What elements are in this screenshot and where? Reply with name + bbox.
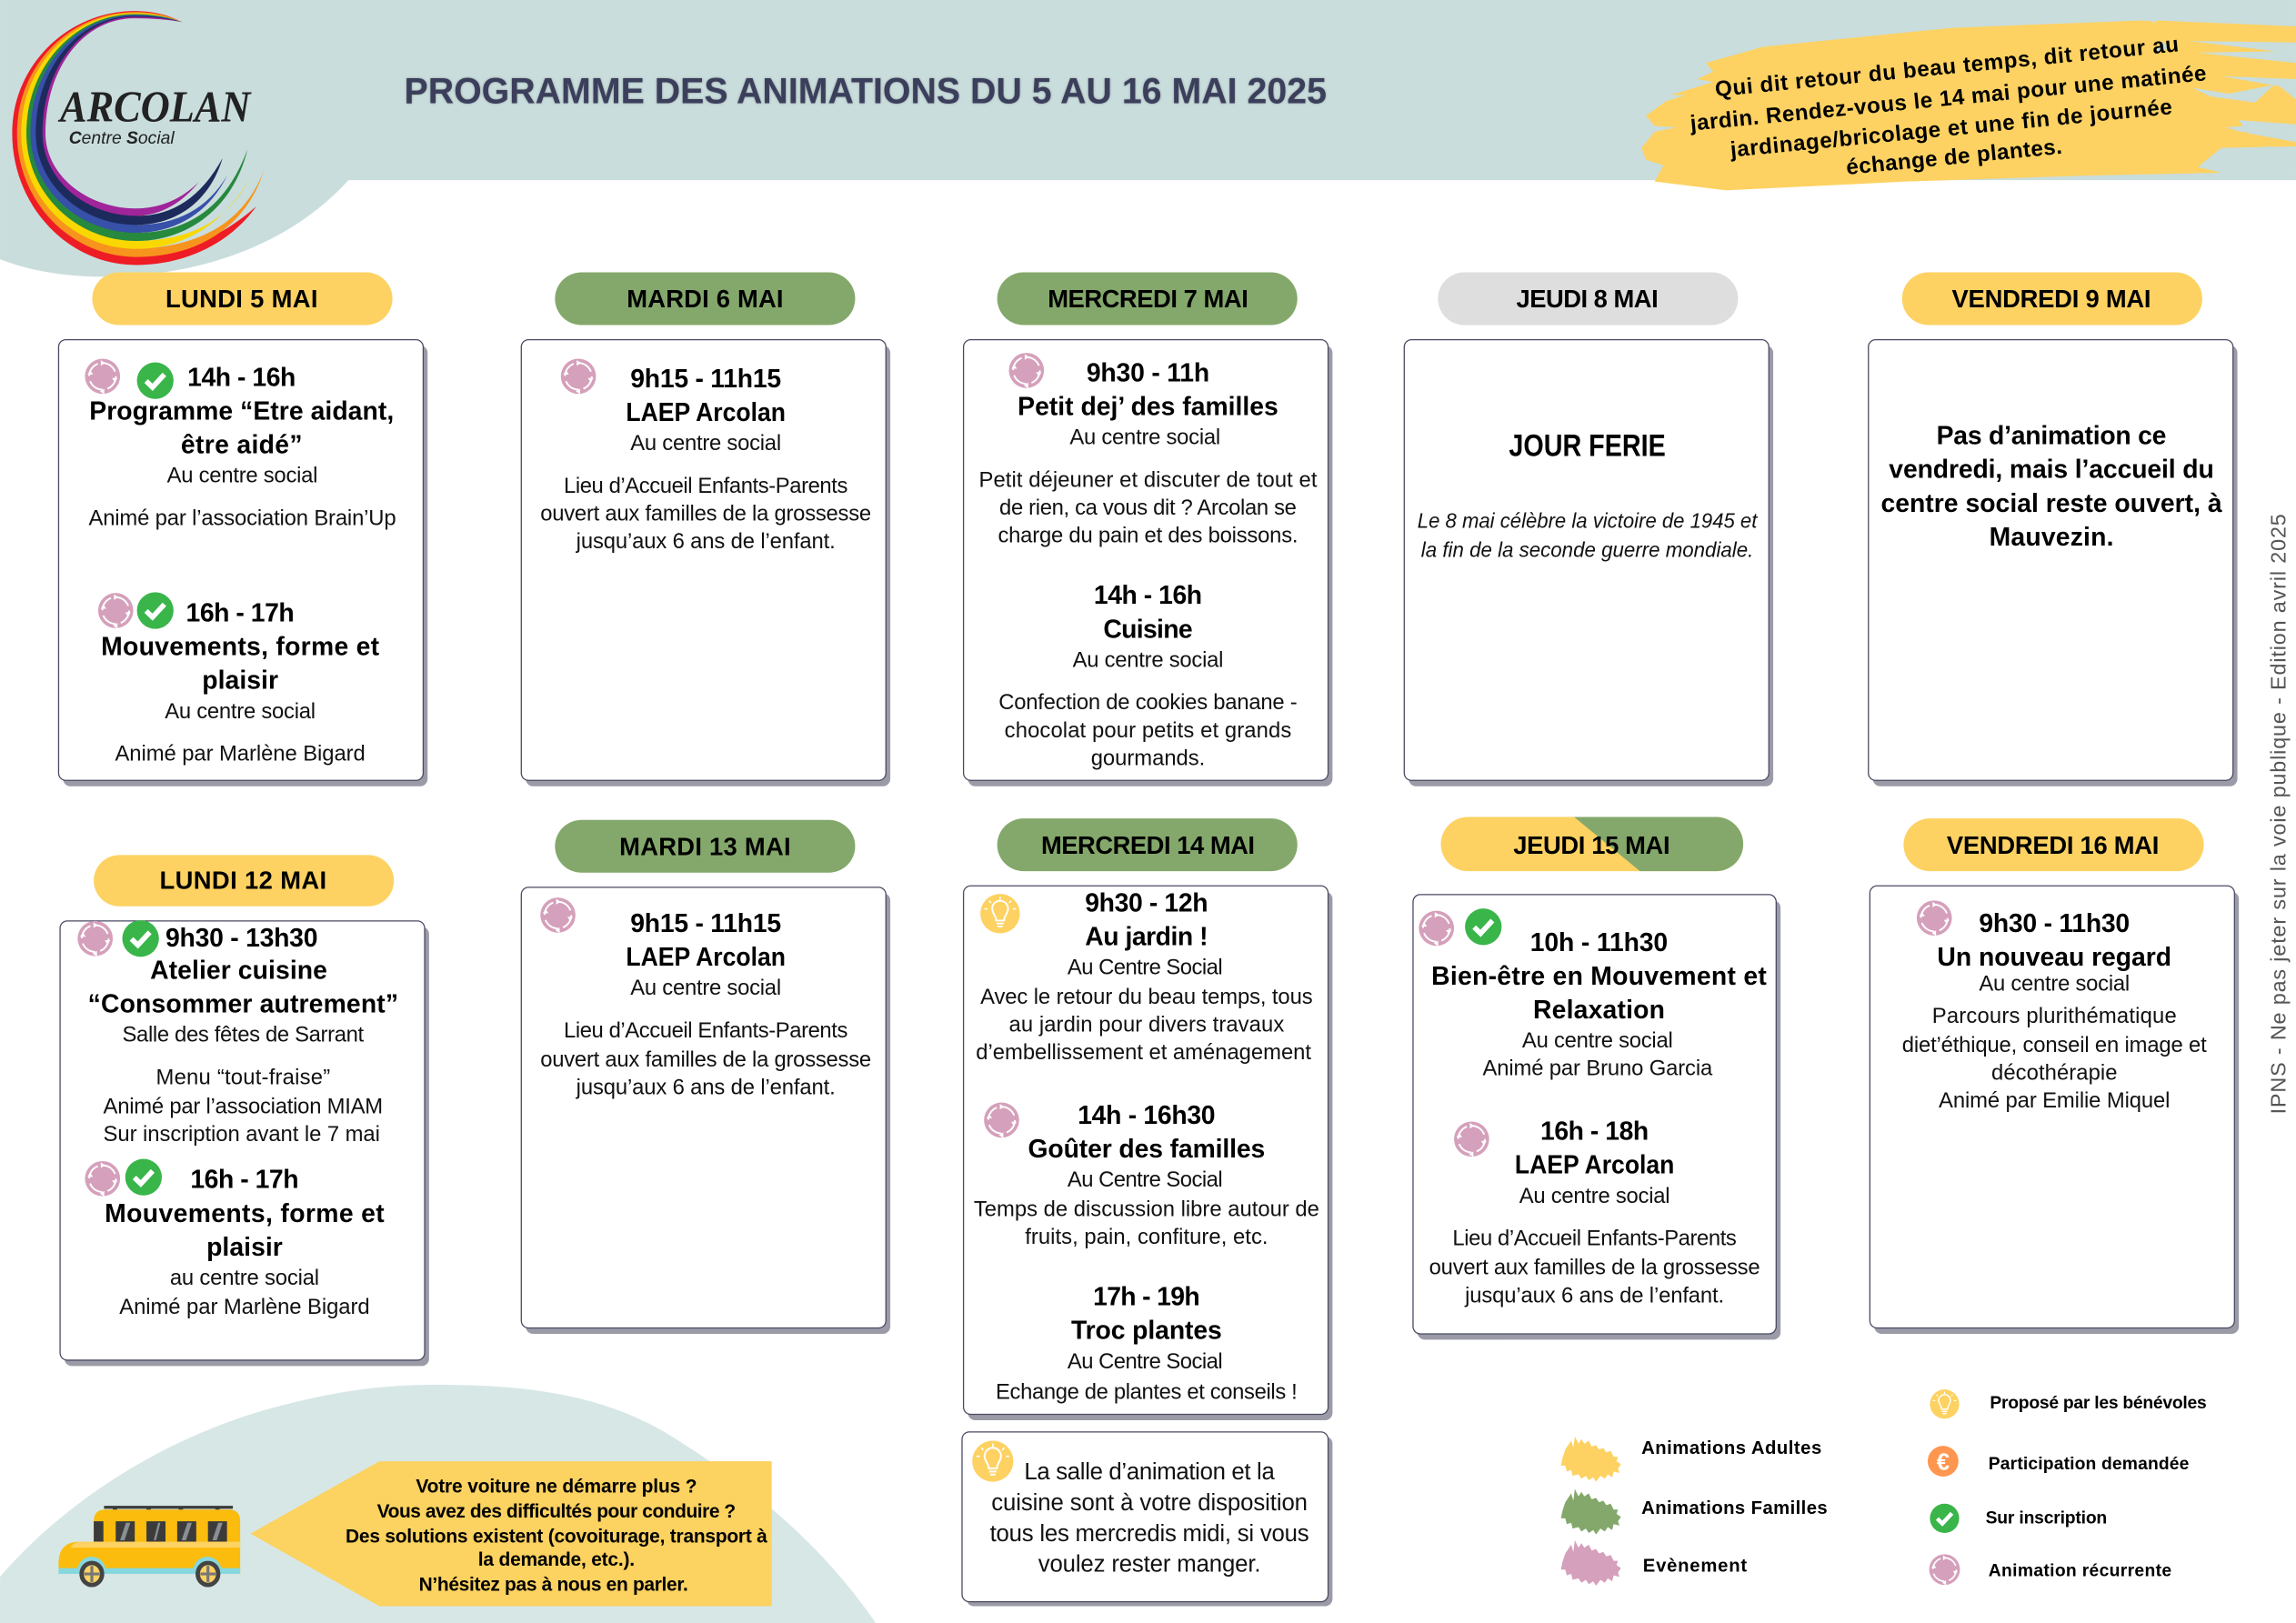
label: Sur inscription	[1986, 1509, 2107, 1528]
day pill	[1441, 817, 1743, 871]
card	[962, 1432, 1332, 1606]
event: gouter des familles: Au Centre Social	[1068, 1167, 1223, 1192]
panel: mercredi 7 mai	[964, 273, 1332, 786]
event: atelier cuisine: Atelier cuisine	[150, 956, 327, 985]
jour ferie note	[1418, 509, 1759, 562]
icon: registration	[137, 363, 174, 399]
event: programme etre aidant: Programme “Etre aidant,	[89, 396, 394, 426]
event: LAEP: 16h - 18h	[1540, 1117, 1649, 1147]
day pill: MERCREDI 14 MAI	[1041, 831, 1255, 859]
no animation note: centre social reste ouvert, à	[1880, 489, 2222, 518]
icon: recurrent	[540, 897, 576, 933]
day pill	[998, 818, 1298, 871]
icon: registration	[137, 592, 174, 629]
event: LAEP	[540, 365, 871, 554]
icon: bus	[58, 1506, 240, 1588]
day pill	[555, 820, 855, 873]
icon: registration	[122, 920, 159, 957]
event: LAEP: 9h15 - 11h15	[630, 909, 781, 938]
event: LAEP	[1429, 1117, 1760, 1307]
event: cuisine: Au centre social	[1073, 647, 1223, 672]
panel: mardi 13 mai	[521, 820, 890, 1334]
callout: garden brush stroke	[1641, 21, 2296, 190]
icon: recurrent	[85, 1161, 120, 1197]
card	[964, 340, 1332, 786]
event: mouvements: 16h - 17h	[190, 1166, 299, 1195]
event: gouter des familles: Temps de discussion libre autour de	[974, 1197, 1319, 1221]
no animation note	[1880, 422, 2222, 552]
event: mouvements forme et plaisir	[101, 599, 380, 766]
card	[521, 887, 890, 1334]
event: troc plantes: 17h - 19h	[1093, 1283, 1200, 1312]
panel: jeudi 15 mai	[1413, 817, 1780, 1339]
event: atelier cuisine: Sur inscription avant le 7 mai	[104, 1122, 380, 1147]
event: cuisine: chocolat pour petits et grands	[1005, 718, 1291, 743]
card	[964, 886, 1332, 1420]
no animation note: Mauvezin.	[1990, 523, 2113, 552]
event: LAEP: Lieu d’Accueil Enfants-Parents	[1452, 1227, 1737, 1251]
day pill: VENDREDI 16 MAI	[1947, 831, 2159, 859]
callout text: Qui dit retour du beau temps, dit retour au	[1714, 32, 2180, 102]
event: LAEP: Lieu d’Accueil Enfants-Parents	[564, 474, 847, 498]
event: LAEP: LAEP Arcolan	[626, 943, 786, 972]
label: Evènement	[1643, 1557, 1747, 1577]
event: petit dej: 9h30 - 11h	[1087, 358, 1209, 387]
jour ferie heading: JOUR FERIE	[1509, 429, 1666, 464]
event: un nouveau regard: Au centre social	[1979, 971, 2130, 996]
card	[1869, 340, 2238, 786]
event: un nouveau regard	[1902, 909, 2207, 1113]
icon: adult swatch	[1561, 1437, 1621, 1482]
event: mouvements forme et plaisir: 16h - 17h	[186, 599, 295, 628]
icon: bulb	[1930, 1389, 1960, 1418]
event: mouvements forme et plaisir: Animé par Marlène Bigard	[115, 742, 366, 766]
event: LAEP: jusqu’aux 6 ans de l’enfant.	[576, 529, 836, 554]
brush stroke	[1641, 21, 2296, 190]
callout: transport arrow: Des solutions existent (covoiturage, transport à	[346, 1526, 767, 1547]
panel: mardi 6 mai	[521, 273, 890, 786]
icon: recurrent	[1454, 1121, 1489, 1157]
event: mouvements: plaisir	[206, 1233, 283, 1262]
icon: recurrent	[1930, 1554, 1960, 1585]
event: un nouveau regard: 9h30 - 11h30	[1979, 909, 2130, 938]
rainbow rings	[12, 11, 264, 265]
event: petit dej	[979, 358, 1318, 548]
icon: family swatch	[1561, 1489, 1621, 1535]
icon: volunteers	[980, 894, 1020, 934]
event: un nouveau regard: Parcours plurithématique	[1932, 1004, 2177, 1028]
card	[1870, 886, 2239, 1334]
bottom-left background shape	[0, 1385, 876, 1623]
event: cuisine: Confection de cookies banane -	[998, 690, 1298, 715]
event: LAEP: jusqu’aux 6 ans de l’enfant.	[576, 1076, 836, 1100]
logo: Arcolan Centre Social	[12, 11, 264, 265]
card	[1404, 340, 1773, 786]
event: LAEP: 9h15 - 11h15	[630, 365, 781, 394]
event: mouvements: Mouvements, forme et	[105, 1199, 385, 1228]
icon: recurrent	[77, 921, 113, 957]
icon: recurrent	[561, 359, 596, 395]
event: atelier cuisine: Salle des fêtes de Sarrant	[122, 1023, 365, 1047]
event: atelier cuisine: Animé par l’association MIAM	[104, 1095, 383, 1119]
event: LAEP: Au centre social	[1519, 1184, 1670, 1208]
text	[990, 1459, 1309, 1578]
event: LAEP: ouvert aux familles de la grossesse	[1429, 1256, 1760, 1280]
jour ferie note: la fin de la seconde guerre mondiale.	[1421, 538, 1753, 562]
icon: euro: €	[1937, 1450, 1950, 1476]
event: bien-etre: 10h - 11h30	[1530, 928, 1668, 957]
event: au jardin	[976, 888, 1313, 1065]
day pill: JEUDI 8 MAI	[1516, 285, 1659, 313]
event: atelier cuisine: Menu “tout-fraise”	[156, 1065, 330, 1089]
icon: registration	[1465, 908, 1501, 945]
side note: IPNS - Ne pas jeter sur la voie publique - Edition avril 2025	[2267, 514, 2291, 1114]
event: bien-etre	[1431, 928, 1767, 1081]
day pill: LUNDI 5 MAI	[165, 285, 317, 313]
event: un nouveau regard: diet’éthique, conseil en image et	[1902, 1033, 2207, 1057]
event: bien-etre: Animé par Bruno Garcia	[1482, 1057, 1713, 1081]
panel: jeudi 8 mai	[1404, 273, 1773, 786]
callout: transport arrow: la demande, etc.).	[478, 1549, 635, 1570]
event: LAEP: ouvert aux familles de la grossesse	[540, 501, 871, 526]
label: Proposé par les bénévoles	[1990, 1394, 2207, 1413]
event: mouvements forme et plaisir: Mouvements, forme et	[101, 633, 380, 662]
icon: check	[1930, 1504, 1960, 1533]
icon: recurrent	[85, 359, 120, 395]
text: cuisine sont à votre disposition	[991, 1490, 1308, 1516]
panel: vendredi 16 mai	[1870, 818, 2239, 1334]
event: programme etre aidant: Au centre social	[167, 464, 317, 488]
day pill	[1902, 273, 2202, 325]
day pill: MARDI 13 MAI	[619, 832, 791, 860]
event: programme etre aidant: être aidé”	[181, 430, 303, 459]
event: gouter des familles: 14h - 16h30	[1078, 1101, 1216, 1130]
logo subtitle: Centre Social	[69, 129, 175, 148]
icon: euro	[1928, 1446, 1959, 1477]
event: petit dej: Au centre social	[1069, 426, 1220, 450]
header background	[0, 0, 2296, 276]
day pill	[94, 855, 394, 907]
event: gouter des familles	[974, 1101, 1319, 1249]
event: un nouveau regard: décothérapie	[1991, 1061, 2118, 1086]
no animation note: Pas d’animation ce	[1937, 422, 2166, 451]
event: mouvements: Animé par Marlène Bigard	[119, 1295, 370, 1319]
event: cuisine: gourmands.	[1091, 746, 1205, 770]
jour ferie note: Le 8 mai célèbre la victoire de 1945 et	[1418, 509, 1759, 533]
label: Animations Adultes	[1641, 1438, 1821, 1458]
event: gouter des familles: fruits, pain, confiture, etc.	[1025, 1225, 1268, 1249]
legend: pictograms	[1928, 1389, 2207, 1585]
icon: recurrent	[1419, 911, 1454, 947]
event: LAEP: Au centre social	[630, 976, 781, 1000]
icon: event swatch	[1561, 1540, 1621, 1586]
icon: recurrent	[98, 593, 134, 628]
event: troc plantes: Au Centre Social	[1068, 1349, 1223, 1374]
day pill: JEUDI 15 MAI	[1513, 831, 1670, 859]
event: troc plantes: Troc plantes	[1071, 1317, 1222, 1346]
icon: recurrent	[1917, 900, 1952, 936]
callout: transport arrow: N’hésitez pas à nous en parler.	[419, 1575, 688, 1596]
callout text: jardinage/bricolage et une fin de journée	[1729, 95, 2173, 163]
event: petit dej: de rien, ca vous dit ? Arcolan se	[999, 496, 1297, 520]
event: petit dej: charge du pain et des boissons.	[998, 524, 1298, 548]
event: mouvements	[105, 1166, 385, 1319]
event: petit dej: Petit dej’ des familles	[1018, 393, 1278, 422]
panel: vendredi 9 mai	[1869, 273, 2238, 786]
callout: transport arrow: Votre voiture ne démarre plus ?	[416, 1477, 697, 1498]
no animation note: vendredi, mais l’accueil du	[1889, 456, 2214, 485]
event: programme etre aidant: Animé par l’association Brain’Up	[88, 506, 396, 530]
panel: salle d'animation	[962, 1432, 1332, 1606]
card	[60, 921, 429, 1366]
card	[521, 340, 890, 786]
panel: mercredi 14 mai	[964, 818, 1332, 1420]
icon: registration	[125, 1159, 162, 1196]
event: bien-etre: Bien-être en Mouvement et	[1431, 962, 1767, 991]
callout: transport arrow: Vous avez des difficultés pour conduire ?	[377, 1501, 736, 1522]
event: LAEP: LAEP Arcolan	[1515, 1151, 1674, 1180]
event: au jardin: au jardin pour divers travaux	[1009, 1012, 1284, 1037]
event: au jardin: Avec le retour du beau temps, tous	[980, 985, 1313, 1009]
event: bien-etre: Relaxation	[1533, 996, 1665, 1025]
event: LAEP: LAEP Arcolan	[626, 398, 786, 427]
event: cuisine	[998, 581, 1298, 770]
day pill	[1903, 818, 2204, 871]
icon: recurrent	[984, 1103, 1019, 1138]
text: tous les mercredis midi, si vous	[990, 1521, 1309, 1547]
event: un nouveau regard: Animé par Emilie Miquel	[1939, 1088, 2170, 1113]
event: au jardin: Au jardin !	[1085, 922, 1208, 951]
event: cuisine: 14h - 16h	[1094, 581, 1202, 610]
event: au jardin: 9h30 - 12h	[1085, 888, 1208, 917]
callout text: échange de plantes.	[1845, 135, 2063, 180]
event: gouter des familles: Goûter des familles	[1028, 1135, 1265, 1164]
day pill: VENDREDI 9 MAI	[1952, 285, 2151, 313]
event: petit dej: Petit déjeuner et discuter de tout et	[979, 467, 1318, 492]
event: programme etre aidant: 14h - 16h	[187, 363, 296, 392]
label: Participation demandée	[1989, 1455, 2190, 1474]
legend: categories	[1561, 1437, 1828, 1586]
day pill: MARDI 6 MAI	[627, 285, 784, 313]
event: un nouveau regard: Un nouveau regard	[1937, 943, 2171, 972]
day pill	[1438, 273, 1738, 325]
event: mouvements forme et plaisir: Au centre social	[165, 699, 316, 724]
event: atelier cuisine: “Consommer autrement”	[88, 990, 398, 1019]
panel: lundi 12 mai	[60, 855, 429, 1366]
event: troc plantes	[996, 1283, 1298, 1405]
event: LAEP: Lieu d’Accueil Enfants-Parents	[564, 1018, 847, 1043]
event: LAEP: jusqu’aux 6 ans de l’enfant.	[1464, 1283, 1724, 1307]
callout text	[1689, 32, 2208, 180]
day pill: LUNDI 12 MAI	[160, 866, 326, 894]
event: atelier cuisine	[88, 924, 398, 1147]
icon: recurrent	[1009, 353, 1044, 388]
day pill	[92, 273, 393, 325]
day pill: MERCREDI 7 MAI	[1048, 285, 1248, 313]
text: voulez rester manger.	[1038, 1552, 1260, 1578]
event: LAEP	[540, 909, 871, 1100]
event: LAEP: Au centre social	[630, 431, 781, 456]
brush gaps	[2155, 41, 2296, 173]
label: Animation récurrente	[1989, 1561, 2171, 1580]
event: troc plantes: Echange de plantes et conseils !	[996, 1380, 1298, 1405]
card	[58, 340, 427, 786]
event: au jardin: d’embellissement et aménagement	[976, 1040, 1311, 1065]
event: mouvements forme et plaisir: plaisir	[202, 666, 278, 696]
day pill	[998, 273, 1298, 325]
panel: lundi 5 mai	[58, 273, 427, 786]
logo name: ARCOLAN	[57, 84, 252, 132]
title: PROGRAMME DES ANIMATIONS DU 5 AU 16 MAI 2025	[404, 71, 1327, 111]
icon: volunteers	[972, 1441, 1013, 1482]
event: mouvements: au centre social	[170, 1266, 319, 1290]
event: cuisine: Cuisine	[1103, 615, 1193, 644]
event: programme etre aidant	[88, 363, 396, 530]
callout: transport arrow	[250, 1461, 772, 1606]
event: LAEP: ouvert aux familles de la grossesse	[540, 1047, 871, 1072]
day pill	[555, 273, 855, 325]
card	[1413, 895, 1780, 1339]
event: atelier cuisine: 9h30 - 13h30	[165, 924, 317, 953]
label: Animations Familles	[1641, 1498, 1828, 1518]
event: bien-etre: Au centre social	[1522, 1028, 1673, 1053]
text: La salle d’animation et la	[1024, 1459, 1275, 1485]
event: au jardin: Au Centre Social	[1068, 956, 1223, 980]
callout text: jardin. Rendez-vous le 14 mai pour une matinée	[1689, 61, 2208, 136]
